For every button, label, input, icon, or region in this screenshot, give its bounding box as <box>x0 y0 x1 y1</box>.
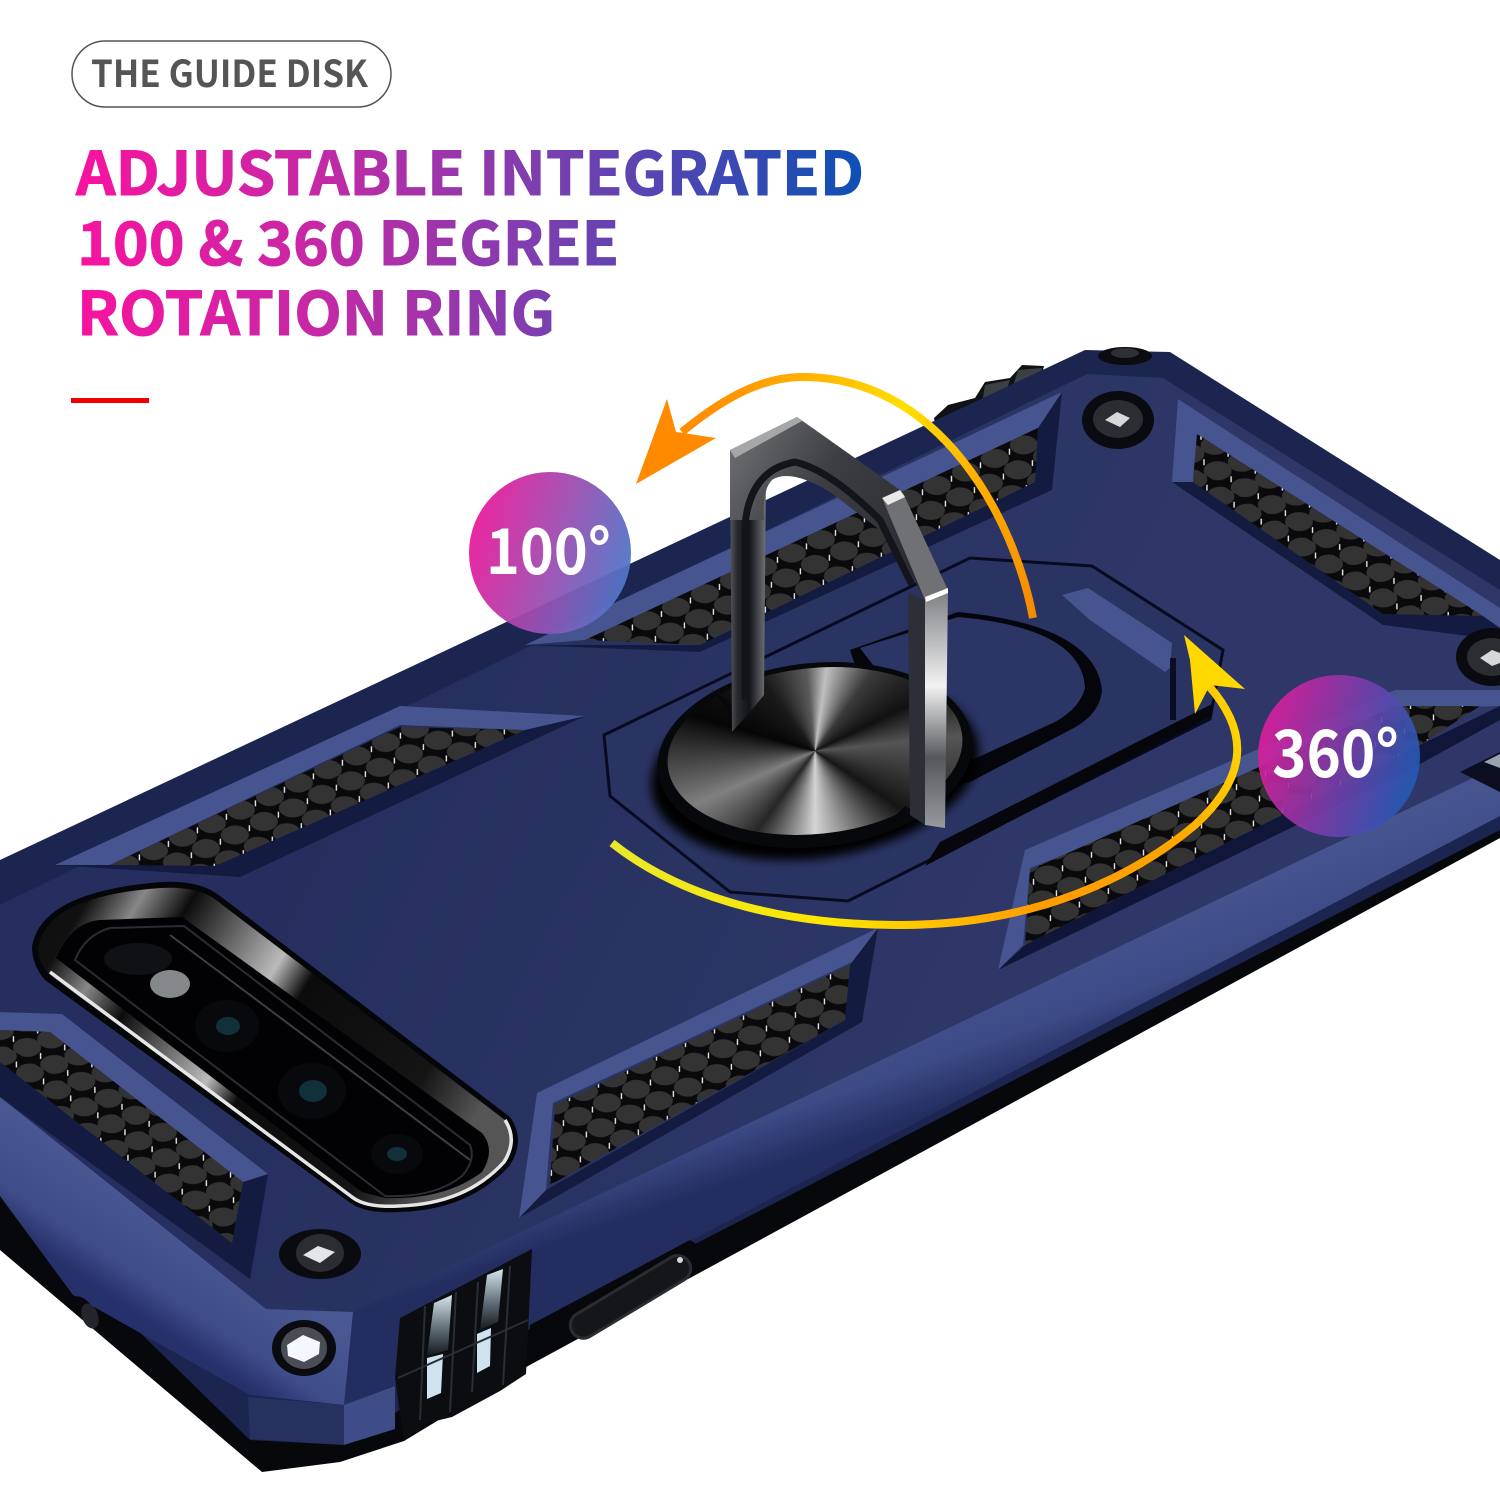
red accent bar <box>71 398 149 403</box>
honeycomb panel: right lower <box>998 690 1500 970</box>
brand pill: THE GUIDE DISK <box>91 44 369 98</box>
corner volume buttons <box>395 1249 532 1441</box>
ring track recess <box>850 612 1102 800</box>
screw: lower corner <box>272 1320 336 1376</box>
camera lens 2 <box>278 1063 346 1119</box>
metal ring <box>730 417 948 828</box>
corner chamfer <box>248 1386 395 1445</box>
arrow: 360 degree rotation <box>612 635 1245 925</box>
ring inner dark edge <box>908 592 925 825</box>
case face <box>0 374 1500 1312</box>
badge: 100 degrees: 100° <box>486 502 611 593</box>
badge: 360 degrees <box>1258 675 1420 837</box>
title <box>75 126 864 353</box>
title: 100 & 360 DEGREE <box>77 196 619 283</box>
honeycomb panel: lower left <box>0 1012 268 1279</box>
title: ADJUSTABLE INTEGRATED <box>75 126 864 213</box>
disk notches <box>712 690 915 828</box>
arrowhead <box>1184 635 1245 714</box>
case body dark outer band <box>0 350 1500 1445</box>
ring inner dark curve <box>745 462 912 700</box>
camera lens 1 <box>195 1000 259 1052</box>
badge: 360 degrees: 360° <box>1272 702 1399 796</box>
ring top facet <box>730 417 802 458</box>
honeycomb panel: upper centre <box>525 392 1062 652</box>
ring right facet <box>883 493 948 600</box>
screw: lower left inner <box>279 1229 361 1279</box>
mount highlight <box>1062 588 1172 672</box>
screw: upper <box>1082 391 1154 449</box>
camera sensor <box>104 943 172 975</box>
side power button <box>530 1240 705 1350</box>
ring base disk shadow <box>639 656 991 880</box>
badge: 100 degrees <box>469 472 631 634</box>
honeycomb panel: top right <box>1172 399 1500 640</box>
screw: top edge <box>1098 347 1152 365</box>
camera flash <box>150 970 190 998</box>
title: ROTATION RING <box>77 266 555 353</box>
right edge wedge <box>1460 752 1500 792</box>
camera lens 3 <box>371 1134 423 1174</box>
honeycomb panel: upper left <box>55 706 585 877</box>
ring right leg <box>925 590 948 828</box>
ring mount octagon <box>604 558 1223 901</box>
arrowhead <box>636 399 716 484</box>
black phone side silhouette <box>0 760 1500 1472</box>
ring highlights <box>925 588 948 602</box>
left rim <box>0 1097 353 1405</box>
top edge buttons <box>934 365 1044 430</box>
arrow: 100 degree rotation <box>636 377 1033 618</box>
ring arch <box>730 417 948 600</box>
ring base disk <box>648 647 982 863</box>
phone case illustration <box>0 347 1500 1472</box>
headphone port <box>72 1296 110 1335</box>
brushed metal disk <box>650 650 980 860</box>
screw: right <box>1456 628 1500 686</box>
ring left leg <box>730 460 766 732</box>
lower rim <box>344 765 1500 1405</box>
honeycomb panel: centre lower <box>519 928 878 1218</box>
camera module <box>32 882 518 1212</box>
